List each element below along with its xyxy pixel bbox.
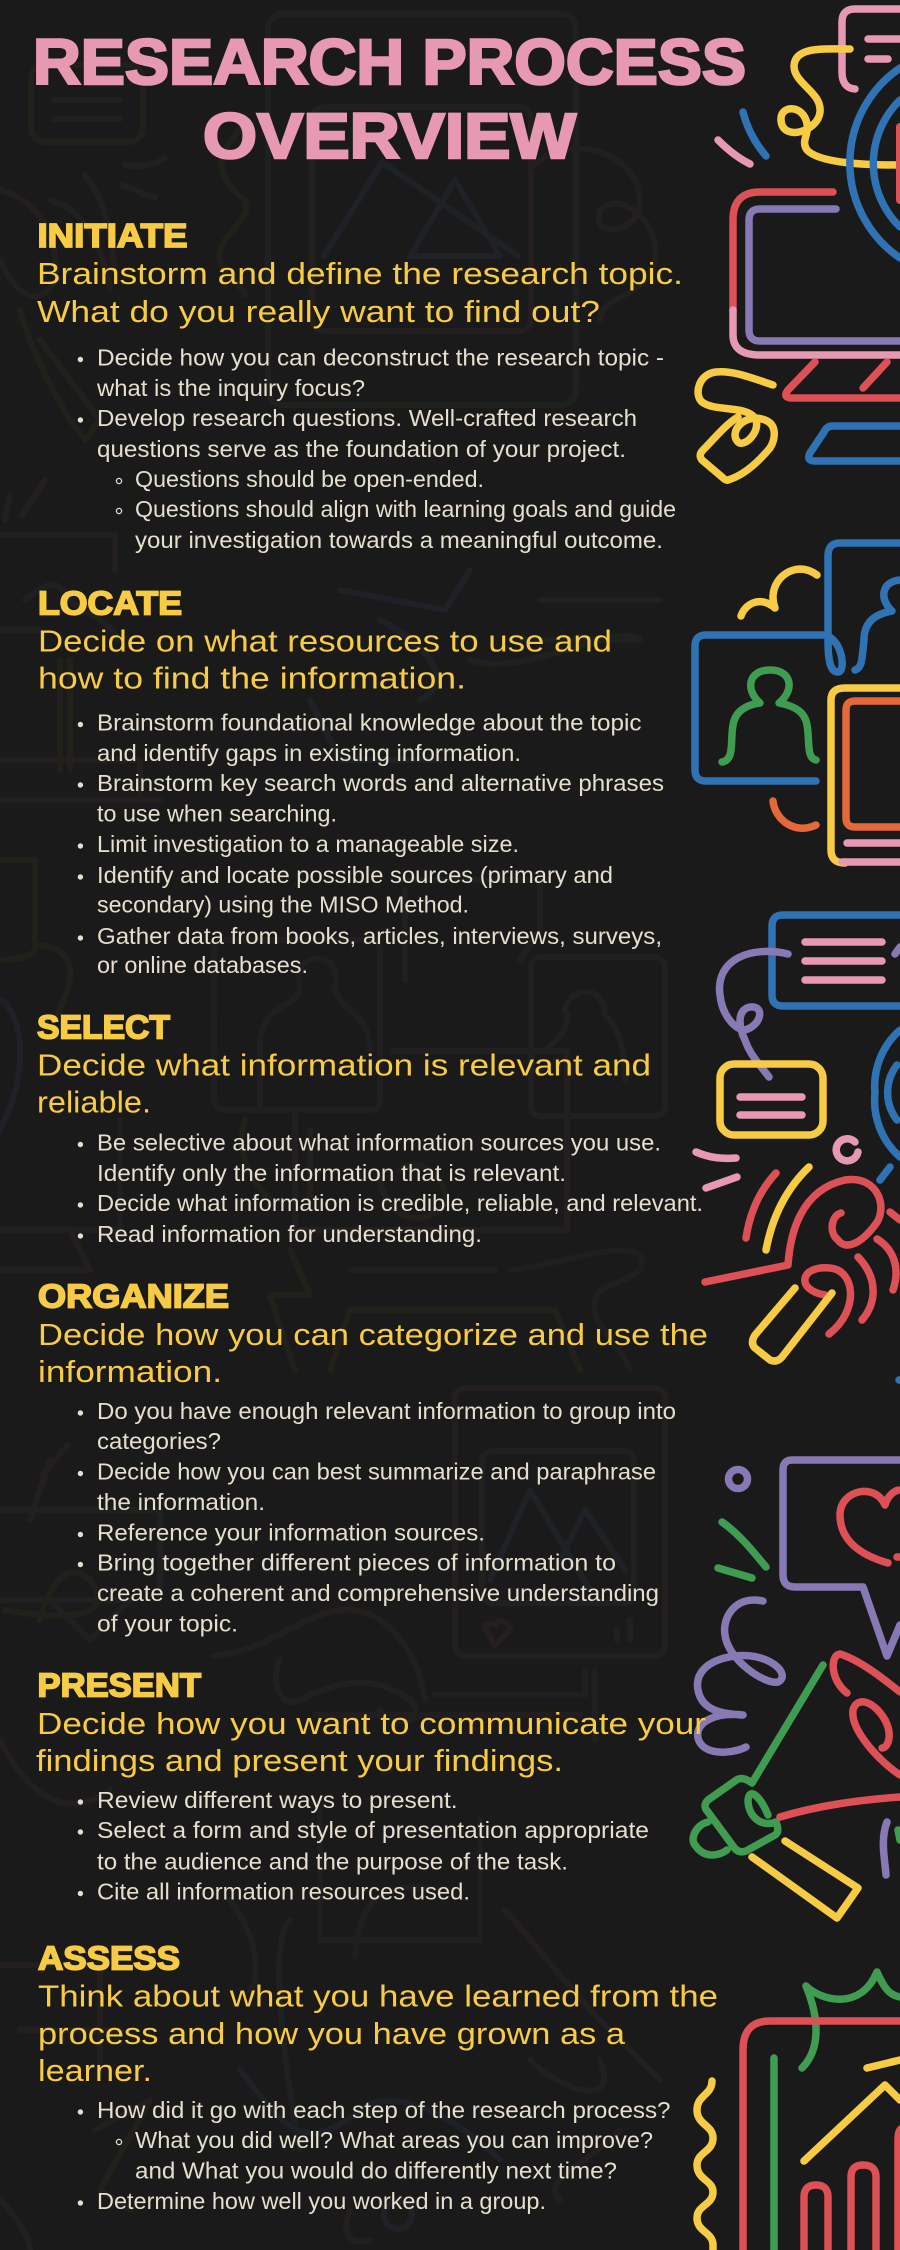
pink dashes and ring <box>696 1139 858 1188</box>
bullet list: Brainstorm key search words and alternative phrases <box>97 770 664 796</box>
bullet list: and identify gaps in existing information. <box>97 740 521 766</box>
yellow cloud <box>741 569 817 616</box>
bullet list: Identify and locate possible sources (primary and <box>97 862 613 888</box>
bullet list: or online databases. <box>97 952 308 978</box>
bullet list: Select a form and style of presentation appropriate <box>97 1817 649 1843</box>
background: faint doodle pattern <box>0 14 665 2250</box>
bullet list: Determine how well you worked in a group. <box>97 2188 546 2214</box>
monitor <box>733 192 900 398</box>
subheading: Brainstorm and define the research topic. <box>37 256 683 291</box>
subheading: process and how you have grown as a <box>38 2016 626 2051</box>
bullet list: the information. <box>97 1489 265 1515</box>
bullet list <box>78 1787 649 1904</box>
bullet list <box>78 1130 703 1247</box>
bullet list: Develop research questions. Well-crafted research <box>97 405 637 431</box>
section: present <box>36 1666 706 1904</box>
bullet list: Questions should be open-ended. <box>135 466 484 492</box>
trend line <box>804 2060 900 2161</box>
purple connector <box>720 947 900 1077</box>
subheading <box>36 1706 706 1778</box>
bullet list: categories? <box>97 1428 221 1454</box>
subheading: Decide how you can categorize and use the <box>38 1317 708 1352</box>
title: RESEARCH PROCESS <box>33 26 746 98</box>
bullet list <box>78 2097 670 2214</box>
subheading <box>37 256 683 329</box>
bullet list: Decide what information is credible, reliable, and relevant. <box>97 1190 703 1216</box>
illustration: video call with people <box>695 543 900 863</box>
section: locate <box>38 584 664 978</box>
bullet list: Be selective about what information sources you use. <box>97 1130 661 1156</box>
subheading: Decide how you want to communicate your <box>37 1706 706 1741</box>
bullet list: Do you have enough relevant information to group into <box>97 1398 676 1424</box>
bullet list: to the audience and the purpose of the task. <box>97 1848 568 1874</box>
illustration: bar chart panel <box>697 1972 900 2250</box>
blue speech frames <box>695 543 900 781</box>
title <box>33 26 746 172</box>
section: assess <box>38 1940 718 2214</box>
partial person <box>855 580 900 670</box>
bullet list: Reference your information sources. <box>97 1520 485 1546</box>
subheading: Think about what you have learned from the <box>38 1978 718 2014</box>
subheading: What do you really want to find out? <box>37 294 600 329</box>
orange arc <box>773 801 816 828</box>
subheading <box>38 1317 708 1389</box>
red frame <box>743 2021 900 2250</box>
subheading: learner. <box>38 2053 152 2088</box>
heading: PRESENT <box>38 1666 201 1704</box>
subheading: Decide on what resources to use and <box>38 624 612 658</box>
bars <box>804 2128 900 2250</box>
section: initiate <box>37 217 683 553</box>
yellow squiggle <box>781 49 900 165</box>
bullet list: Bring together different pieces of information to <box>97 1550 616 1576</box>
heading: SELECT <box>37 1008 170 1046</box>
title: OVERVIEW <box>203 100 577 172</box>
illustration: chat bubbles and hand <box>696 915 900 1380</box>
bullet list: of your topic. <box>97 1610 238 1636</box>
bullet list: Gather data from books, articles, interviews, surveys, <box>97 923 662 949</box>
red hand <box>705 1180 900 1334</box>
bullet list <box>78 344 676 553</box>
bullet list: create a coherent and comprehensive understanding <box>97 1580 659 1606</box>
blue circle <box>875 1030 900 1380</box>
yellow finger <box>752 1288 832 1361</box>
illustration: megaphone and heart bubble <box>693 1460 900 1918</box>
subheading: how to find the information. <box>38 660 466 696</box>
subheading <box>38 624 612 696</box>
yellow message box <box>720 1064 823 1135</box>
section: select <box>37 1008 703 1247</box>
bullet list: Questions should align with learning goals and guide <box>135 496 676 522</box>
subheading <box>38 1978 718 2088</box>
bullet list: Decide how you can best summarize and paraphrase <box>97 1458 656 1484</box>
bullet list: How did it go with each step of the research process? <box>97 2097 670 2123</box>
bullet list: and What you would do differently next time? <box>135 2158 617 2184</box>
heading: ASSESS <box>38 1940 180 1976</box>
subheading <box>37 1048 651 1120</box>
green crown curve <box>802 1972 900 2068</box>
purple squiggle <box>697 1600 782 1752</box>
accent rays <box>718 112 766 164</box>
bullet list: secondary) using the MISO Method. <box>97 892 469 918</box>
tablet <box>831 688 900 863</box>
bullet list: Read information for understanding. <box>97 1221 482 1247</box>
bullet list: Review different ways to present. <box>97 1787 458 1813</box>
mouse <box>698 372 774 480</box>
motion arcs <box>746 1167 809 1250</box>
bullet list: to use when searching. <box>97 800 337 826</box>
bullet list: Identify only the information that is relevant. <box>97 1160 566 1186</box>
bullet list: Decide how you can deconstruct the research topic - <box>97 344 664 370</box>
megaphone <box>693 1654 900 1918</box>
bullet list: Cite all information resources used. <box>97 1878 470 1904</box>
green rays <box>718 1522 766 1578</box>
bullet list: what is the inquiry focus? <box>96 375 365 401</box>
heart speech bubble <box>783 1460 900 1656</box>
green person <box>722 670 816 762</box>
heading: LOCATE <box>38 584 182 622</box>
subheading: Decide what information is relevant and <box>37 1048 651 1082</box>
purple ring <box>728 1470 748 1488</box>
green axis <box>770 2058 778 2250</box>
subheading: reliable. <box>37 1084 151 1120</box>
bullet list: Brainstorm foundational knowledge about the topic <box>97 710 642 736</box>
bullet list <box>78 1398 676 1636</box>
subheading: findings and present your findings. <box>36 1743 563 1778</box>
heading: INITIATE <box>38 217 188 254</box>
section: organize <box>38 1278 708 1636</box>
bullet list: What you did well? What areas you can improve? <box>135 2127 653 2153</box>
bullet list: your investigation towards a meaningful outcome. <box>135 527 663 553</box>
illustration: computer monitor with target and mouse <box>698 9 900 480</box>
heading: ORGANIZE <box>38 1278 229 1314</box>
target circles <box>850 68 900 258</box>
blue message box <box>772 915 900 1006</box>
bullet list: Limit investigation to a manageable size. <box>97 831 519 857</box>
subheading: information. <box>38 1354 222 1389</box>
bullet list: questions serve as the foundation of your project. <box>97 436 626 462</box>
keyboard <box>809 426 900 461</box>
bullet list <box>78 710 664 978</box>
document icon <box>842 9 900 89</box>
yellow wave <box>697 2081 713 2250</box>
